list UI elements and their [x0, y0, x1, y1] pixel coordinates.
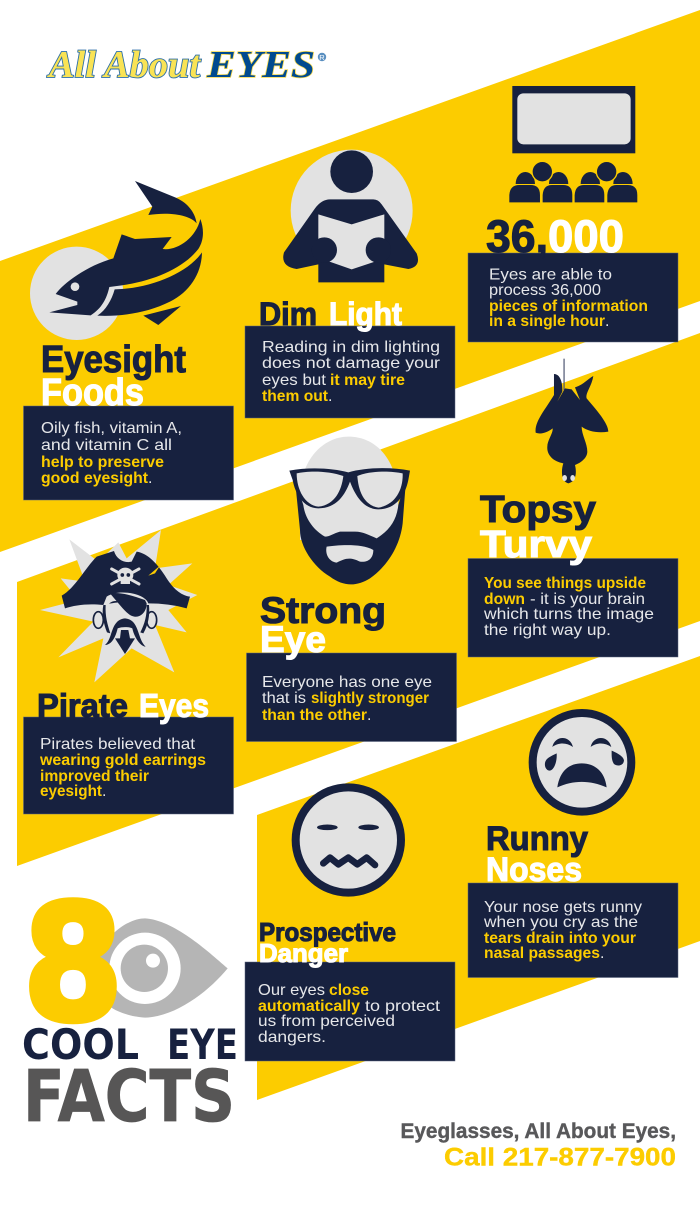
- icon: cinema screen and audience: [509, 86, 637, 202]
- body text: [41, 420, 182, 487]
- text box: [468, 558, 678, 657]
- body text: .: [605, 313, 609, 330]
- body text: [39, 736, 206, 800]
- body text: good eyesight: [41, 470, 149, 487]
- body text: .: [367, 707, 371, 724]
- icon: crying face: [533, 713, 631, 812]
- text box: [24, 717, 234, 814]
- logo: R: [319, 53, 325, 62]
- cool eye: COOL: [22, 1020, 139, 1069]
- body text: nasal passages: [484, 945, 600, 962]
- heading: Eye: [260, 619, 326, 660]
- body text: process 36,000: [489, 282, 601, 299]
- body text: Our eyes: [258, 982, 325, 999]
- body text: [489, 266, 648, 330]
- heading: Foods: [41, 372, 144, 414]
- heading: [480, 489, 596, 566]
- text box: [468, 883, 678, 978]
- footer contact: Eyeglasses, All About Eyes,: [400, 1120, 676, 1143]
- heading: Eyesight: [41, 339, 186, 381]
- text box: [245, 326, 455, 418]
- body text: .: [148, 470, 152, 487]
- icon: fish: [30, 181, 203, 340]
- body text: pieces of information: [489, 298, 648, 315]
- heading: Runny: [486, 820, 588, 858]
- background band: middle: [17, 333, 700, 866]
- body text: eyesight: [40, 783, 103, 800]
- heading: [486, 211, 624, 262]
- body text: when you cry as the: [483, 914, 638, 931]
- facts: FACTS: [23, 1055, 235, 1138]
- icon: eye: [97, 918, 228, 1018]
- heading: [260, 590, 386, 660]
- heading: Turvy: [480, 524, 592, 566]
- heading: Dim: [259, 296, 317, 332]
- body text: to protect: [365, 998, 441, 1015]
- heading: Topsy: [480, 489, 596, 531]
- panel: eyesight foods: [24, 339, 234, 500]
- body text: tears drain into your: [484, 930, 636, 947]
- panel: dim light: [245, 296, 455, 418]
- text box: [245, 962, 455, 1061]
- body text: [262, 339, 441, 405]
- background band: top: [0, 10, 700, 552]
- body text: You see things upside: [484, 575, 646, 592]
- body text: automatically: [258, 998, 360, 1015]
- body text: that is: [262, 690, 306, 707]
- body text: wearing gold earrings: [39, 752, 206, 769]
- logo: All About: [47, 44, 201, 86]
- body text: .: [102, 783, 106, 800]
- heading: [259, 917, 396, 968]
- body text: eyes but: [262, 372, 327, 389]
- body text: the right way up.: [484, 622, 611, 639]
- body text: [258, 982, 441, 1046]
- body text: Reading in dim lighting: [262, 339, 440, 356]
- text box: [24, 406, 234, 500]
- icon: upside-down hanging figure: [536, 359, 608, 483]
- footer contact: [400, 1120, 676, 1172]
- icon: bearded man with glasses: [289, 437, 410, 584]
- body text: slightly stronger: [311, 690, 429, 707]
- panel: topsy turvy: [468, 489, 678, 657]
- text box: [246, 653, 456, 742]
- body text: which turns the image: [483, 606, 654, 623]
- body text: dangers.: [258, 1029, 326, 1046]
- cool eye: [22, 1020, 238, 1069]
- heading: [259, 296, 402, 332]
- panel: strong eye: [246, 590, 456, 742]
- heading: [486, 820, 588, 889]
- heading: Eyes: [139, 687, 209, 724]
- heading: [41, 339, 186, 414]
- heading: 36,: [486, 211, 548, 262]
- body text: Eyes are able to: [489, 266, 612, 284]
- body text: in a single hour: [489, 313, 605, 330]
- panel: pirate eyes: [24, 687, 234, 814]
- body text: Your nose gets runny: [484, 899, 642, 916]
- heading: Danger: [259, 938, 348, 968]
- heading: [37, 687, 209, 724]
- logo: [47, 44, 326, 86]
- body text: close: [329, 982, 369, 999]
- body text: improved their: [40, 768, 149, 785]
- cool eye: EYE: [167, 1020, 238, 1069]
- panel: 36,000: [468, 211, 678, 342]
- body text: them out: [262, 388, 329, 405]
- heading: Prospective: [259, 917, 396, 947]
- body text: - it is your brain: [530, 591, 645, 608]
- body text: [262, 674, 432, 724]
- text box: [468, 253, 678, 342]
- body text: it may tire: [330, 372, 405, 389]
- logo: EYES: [206, 44, 315, 86]
- body text: us from perceived: [258, 1013, 395, 1030]
- panel: runny noses: [468, 820, 678, 978]
- panel: prospective danger: [245, 917, 455, 1061]
- body text: .: [600, 945, 604, 962]
- icon: pirate: [40, 530, 197, 682]
- body text: help to preserve: [41, 454, 164, 471]
- body text: and vitamin C all: [41, 437, 172, 454]
- body text: Pirates believed that: [40, 736, 196, 753]
- heading: Light: [329, 296, 402, 332]
- icon: worried face: [296, 787, 401, 893]
- body text: Oily fish, vitamin A,: [41, 420, 182, 437]
- body text: down: [484, 591, 525, 608]
- icon: person reading: [283, 150, 418, 282]
- body text: [483, 899, 642, 962]
- body text: does not damage your: [262, 355, 441, 372]
- body text: Everyone has one eye: [262, 674, 432, 691]
- heading: Pirate: [37, 687, 128, 724]
- heading: Strong: [260, 590, 386, 631]
- heading: Noses: [486, 851, 582, 889]
- number 8: 8: [23, 870, 123, 1057]
- body text: .: [328, 388, 332, 405]
- body text: than the other: [262, 707, 367, 724]
- background band: bottom: [257, 656, 700, 1100]
- footer contact: Call 217-877-7900: [444, 1144, 676, 1172]
- body text: [483, 575, 654, 639]
- heading: 000: [548, 211, 624, 262]
- title block: 8 cool eye facts: [22, 870, 238, 1138]
